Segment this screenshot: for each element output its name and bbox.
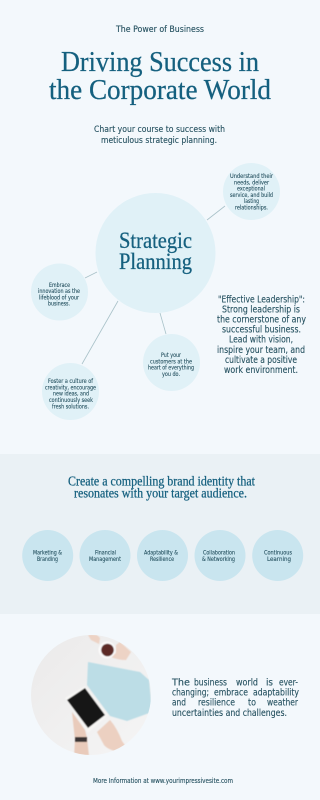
node: creativity: fresh solutions.	[52, 403, 89, 410]
paragraph: changing business world: embrace	[214, 688, 248, 698]
paragraph: changing business world: uncertainties and challenges.	[172, 708, 287, 719]
subtitle: meticulous strategic planning.	[101, 136, 217, 146]
quote: effective leadership	[217, 294, 306, 376]
node: creativity: new ideas, and	[53, 391, 89, 398]
paragraph: changing business world: and	[172, 698, 186, 708]
subtitle	[94, 125, 225, 146]
quote: effective leadership: Lead with vision,	[229, 335, 293, 346]
title: the Corporate World	[49, 74, 271, 106]
paragraph: changing business world	[171, 678, 299, 719]
node: customers first: customers at the	[150, 358, 192, 365]
topic: continuous learning	[252, 530, 303, 581]
quote: effective leadership: successful business.	[222, 325, 301, 336]
node: innovation: lifeblood of your	[39, 294, 79, 301]
node: innovation: Embrace	[49, 282, 70, 289]
node: customers relationships: service, and build	[230, 192, 273, 199]
topic: financial management: Financial	[95, 548, 116, 556]
topic: adaptability and resilience: Adaptability &	[144, 548, 178, 556]
quote: effective leadership: work environment.	[224, 365, 298, 376]
node: customers first: you do.	[162, 371, 180, 378]
connector lines	[82, 206, 225, 364]
central node: Strategic Planning: Planning	[119, 249, 192, 274]
node: creativity: Foster a culture of	[48, 378, 94, 385]
node: customers first: heart of everything	[148, 365, 194, 372]
paragraph: changing business world: weather	[267, 698, 298, 708]
central node: Strategic Planning: Strategic	[119, 228, 192, 253]
node: customers first: Put your	[161, 352, 181, 359]
node: customers first	[143, 334, 200, 391]
eyebrow: The Power of Business	[115, 25, 204, 35]
paragraph: changing business world: world	[236, 678, 258, 688]
topic: collaboration and networking: Collaboration	[203, 548, 235, 556]
paragraph: changing business world: is	[266, 678, 273, 688]
node: creativity: creativity, encourage	[45, 384, 96, 391]
subtitle: Chart your course to success with	[94, 125, 225, 135]
topic: continuous learning: Learning	[267, 555, 291, 563]
node: customers relationships: needs, deliver	[234, 179, 269, 186]
quote: effective leadership: Strong leadership is	[222, 305, 300, 316]
brand heading	[68, 474, 255, 500]
topic: marketing and branding	[22, 530, 73, 581]
topic: adaptability and resilience: Resilience	[150, 555, 174, 563]
paragraph: changing business world: ever-	[279, 678, 298, 688]
topic: marketing and branding: Branding	[37, 555, 58, 563]
paragraph: changing business world: resilience	[198, 698, 235, 708]
node: customers relationships: Understand their	[230, 173, 273, 180]
topic: continuous learning: Continuous	[264, 548, 293, 556]
paragraph: changing business world: adaptability	[253, 688, 299, 698]
photo: hands with tablet and coffee	[31, 634, 152, 756]
topic: collaboration and networking: & Networking	[202, 555, 235, 563]
node: customers relationships: lasting	[244, 198, 259, 205]
quote: effective leadership: cultivate a positive	[225, 355, 297, 366]
central node: Strategic Planning	[96, 193, 216, 313]
footer: More Information at www.yourimpressivesite.com	[93, 777, 233, 785]
brand heading: resonates with your target audience.	[74, 486, 247, 500]
node: customers relationships: exceptional	[237, 186, 265, 193]
node: innovation: innovation as the	[38, 288, 80, 295]
topic: financial management	[80, 530, 130, 581]
paragraph: changing business world: changing;	[172, 688, 209, 698]
node: innovation: business.	[48, 300, 70, 308]
node: customers relationships: relationships.	[235, 204, 268, 212]
topic: adaptability and resilience	[137, 530, 188, 581]
title: Driving Success in	[61, 46, 259, 78]
paragraph: changing business world: to	[248, 698, 256, 708]
paragraph: changing business world: business	[194, 678, 227, 688]
node: innovation	[31, 264, 88, 320]
node: customers relationships	[223, 163, 280, 220]
node: creativity: continuously seek	[49, 397, 93, 404]
brand heading: Create a compelling brand identity that	[68, 474, 255, 488]
panel: brand identity	[0, 454, 320, 614]
topic: marketing and branding: Marketing &	[33, 548, 62, 556]
topic: financial management: Management	[89, 555, 121, 563]
topic: collaboration and networking	[194, 530, 246, 581]
node: creativity	[42, 363, 99, 420]
title	[49, 46, 271, 106]
paragraph: changing business world: The	[171, 678, 190, 688]
